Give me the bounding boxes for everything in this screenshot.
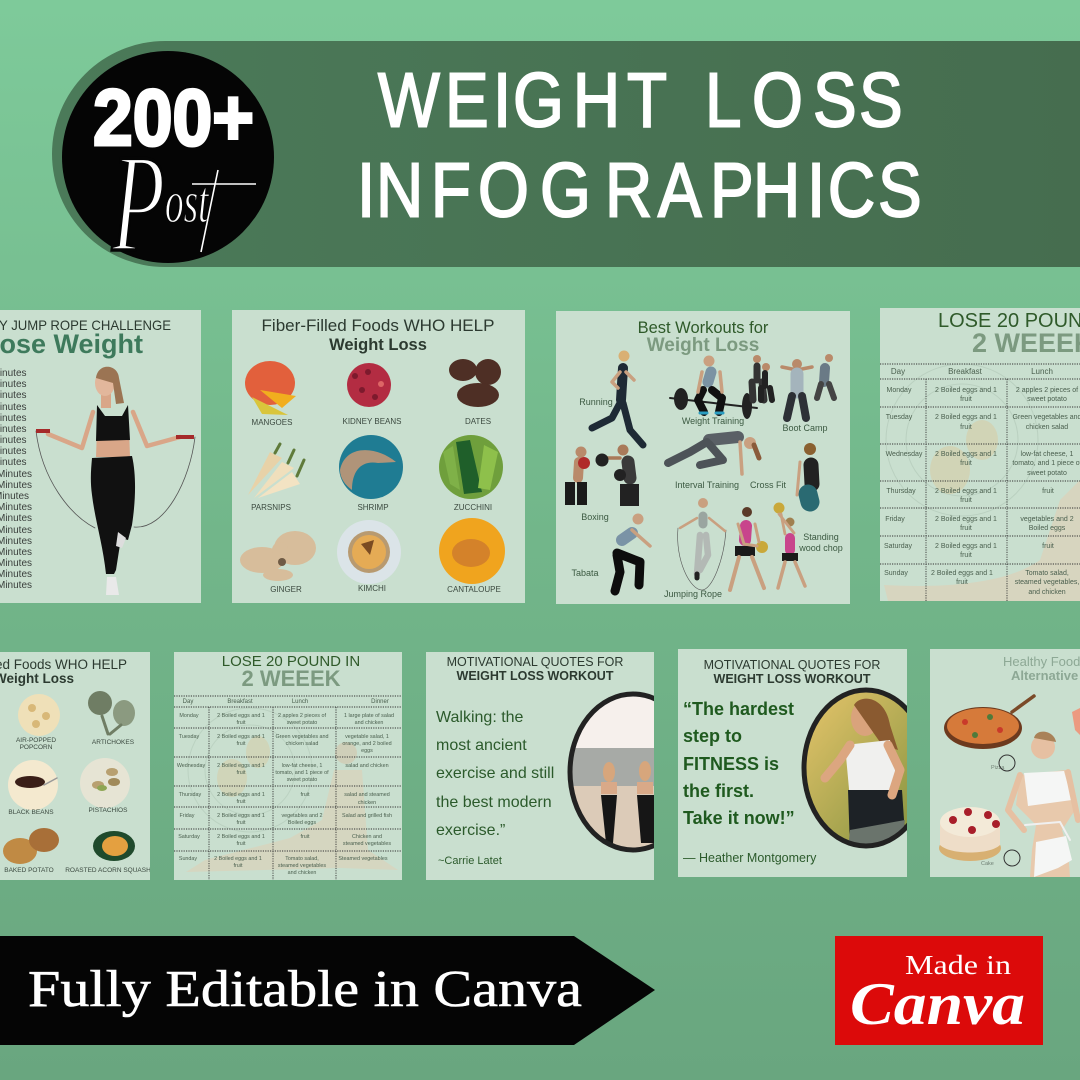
heading: jump rope	[0, 317, 171, 359]
table text: Green vegetables and	[1013, 414, 1080, 421]
figure: interval training	[668, 437, 759, 474]
icon: pistachios	[80, 758, 130, 808]
food labels: KIDNEY BEANS	[343, 417, 401, 426]
table text: Wednesday	[886, 451, 923, 458]
table grid center	[174, 696, 402, 880]
heading: fiber foods second	[0, 657, 127, 686]
table text center: 2 Boiled eggs and 1	[217, 834, 265, 840]
food labels: CANTALOUPE	[447, 585, 501, 594]
table text center: fruit	[234, 863, 243, 869]
table text center: salad and steamed	[344, 792, 390, 798]
table text center: steamed vegetables	[343, 841, 391, 847]
figure: medicine ball woman	[730, 507, 768, 590]
table text center: 2 apples 2 pieces of	[278, 713, 326, 719]
table text: fruit	[1042, 543, 1054, 550]
heading: healthy food: Healthy Food	[1003, 654, 1080, 669]
table text center: Tomato salad,	[285, 856, 319, 862]
heading: motivational quotes second: WEIGHT LOSS WORKOUT	[714, 672, 871, 686]
table text center: Day	[183, 699, 193, 705]
heading: motivational quotes: MOTIVATIONAL QUOTES FOR	[447, 655, 623, 669]
figure: weight training	[670, 356, 757, 419]
figure: woman with jump rope	[36, 367, 195, 595]
table text: Monday	[887, 387, 912, 394]
table text center: Breakfast	[227, 699, 253, 705]
ribbon: fully editable: Fully Editable in Canva	[28, 961, 582, 1018]
quote text	[436, 709, 554, 839]
table text: Sunday	[884, 570, 908, 577]
table text center: tomato, and 1 piece of	[275, 770, 329, 776]
table text: 2 Boiled eggs and 1	[935, 516, 997, 523]
workout labels: Tabata	[571, 568, 599, 578]
food labels second: ARTICHOKES	[92, 739, 135, 746]
food labels second: ROASTED ACORN SQUASH	[65, 867, 151, 874]
icon: popcorn	[18, 694, 60, 736]
panel: fiber-filled foods	[232, 310, 525, 603]
icon: parsnips	[248, 444, 304, 498]
table text center: 2 Boiled eggs and 1	[217, 763, 265, 769]
table text center: fruit	[236, 741, 246, 747]
food labels second: PISTACHIOS	[89, 807, 128, 814]
table text: Thursday	[886, 488, 916, 495]
table text: 2 Boiled eggs and 1	[935, 488, 997, 495]
table text: fruit	[1042, 488, 1054, 495]
food labels second: POPCORN	[20, 744, 53, 751]
figure: boot camp group	[752, 354, 834, 418]
icon: cantaloupe	[439, 518, 505, 584]
food labels: KIMCHI	[358, 584, 386, 593]
table text center: Green vegetables and	[275, 734, 329, 740]
table text: 2 Boiled eggs and 1	[935, 414, 997, 421]
table text: steamed vegetables,	[1015, 579, 1079, 586]
figure: running	[592, 350, 643, 445]
quote text bold: the first.	[683, 781, 754, 801]
icon: mango	[245, 361, 296, 415]
quote text bold: step to	[683, 726, 742, 746]
table text center: fruit	[236, 799, 246, 805]
icon: pizza	[944, 696, 1034, 749]
table text: fruit	[960, 396, 972, 403]
table text: Friday	[885, 516, 905, 523]
quote text: exercise.”	[436, 822, 505, 839]
panel: meal plan table center	[174, 652, 402, 880]
heading: best workouts	[638, 319, 769, 356]
table text center: sweet potato	[287, 720, 317, 726]
table text: Breakfast	[948, 367, 983, 376]
title: INFOGRAPHICS	[357, 148, 922, 234]
table text: sweet potato	[1027, 396, 1067, 403]
food labels second	[4, 737, 151, 874]
table text: 2 Boiled eggs and 1	[935, 387, 997, 394]
heading: motivational quotes	[448, 657, 623, 680]
icon: salmon	[1072, 708, 1080, 735]
heading: lose 20 pound center	[223, 656, 359, 686]
table text: tomato, and 1 piece of	[1012, 460, 1080, 467]
table text: 2 Boiled eggs and 1	[935, 451, 997, 458]
icon: cake	[939, 807, 1001, 861]
workout labels: Boxing	[581, 512, 609, 522]
table text center: 2 Boiled eggs and 1	[217, 713, 265, 719]
table text center: Friday	[180, 813, 195, 819]
panel: healthy food alternatives	[930, 649, 1080, 877]
workout labels: wood chop	[798, 543, 843, 553]
food labels second: BLACK BEANS	[8, 809, 54, 816]
table text center: Chicken and	[352, 834, 382, 840]
figure: tabata	[615, 514, 650, 591]
table text center: fruit	[236, 720, 246, 726]
icon: shrimp	[339, 435, 403, 499]
table text center: sweet potato	[287, 777, 317, 783]
table text: fruit	[960, 552, 972, 559]
attribution second: — Heather Montgomery	[683, 851, 817, 865]
heading: fiber foods	[262, 317, 494, 354]
food labels: ZUCCHINI	[454, 503, 492, 512]
heading: fiber foods: Weight Loss	[329, 336, 427, 354]
table text center: fruit	[300, 792, 310, 798]
panel: jump rope challenge	[0, 310, 201, 603]
background plate and woman	[884, 364, 1080, 601]
quote text: Walking: the	[436, 709, 524, 726]
table text center: fruit	[236, 820, 246, 826]
title	[357, 58, 922, 234]
photo: woman running	[802, 688, 907, 848]
table text center: 2 Boiled eggs and 1	[217, 813, 265, 819]
table text center: Saturday	[178, 834, 200, 840]
table text center: Salad and grilled fish	[342, 813, 392, 819]
table text: fruit	[960, 460, 972, 467]
food labels and circles	[981, 755, 1020, 867]
table text center: Lunch	[292, 699, 308, 705]
quote text bold: “The hardest	[683, 699, 794, 719]
heading: best workouts: Best Workouts for	[638, 319, 769, 337]
table text center: Tuesday	[179, 734, 200, 740]
food labels second: AIR-POPPED	[16, 737, 56, 744]
badge: 200+ Post	[62, 51, 274, 281]
table text: Tuesday	[886, 414, 913, 421]
panel: quote fitness	[678, 649, 930, 877]
figure: woman with tape	[1008, 732, 1078, 877]
table text: 2 Boiled eggs and 1	[935, 543, 997, 550]
table text center: low-fat cheese, 1	[282, 763, 322, 769]
table text center: Monday	[179, 713, 199, 719]
food labels and circles: Pizza	[991, 765, 1005, 771]
workout labels	[571, 397, 843, 599]
figure: jumping rope	[678, 498, 726, 590]
food labels: GINGER	[270, 585, 302, 594]
icon: ginger	[240, 531, 316, 581]
heading: motivational quotes second	[704, 660, 880, 683]
food labels: PARSNIPS	[251, 503, 291, 512]
ribbon: fully editable	[0, 936, 655, 1045]
photo: women on beach	[568, 692, 654, 852]
table text center: fruit	[236, 841, 246, 847]
heading: lose 20 pound	[940, 313, 1080, 352]
icon: acorn squash	[93, 831, 135, 861]
quote text: the best modern	[436, 794, 552, 811]
badge: 200+ Post: ost	[165, 169, 209, 235]
table text: and chicken	[1028, 589, 1066, 596]
table text center: 2 Boiled eggs and 1	[217, 792, 265, 798]
food labels second: BAKED POTATO	[4, 867, 54, 874]
heading: motivational quotes: WEIGHT LOSS WORKOUT	[457, 669, 614, 683]
table text center: vegetable salad, 1	[345, 734, 389, 740]
table text: low-fat cheese, 1	[1021, 451, 1074, 458]
icon: kidney beans	[347, 363, 391, 407]
icon: zucchini	[439, 435, 503, 499]
heading: lose 20 pound center: LOSE 20 POUND IN	[222, 653, 360, 670]
heading: healthy food: Alternative	[1011, 668, 1078, 683]
quote text: most ancient	[436, 737, 527, 754]
table text: Boiled eggs	[1029, 525, 1066, 532]
quote text bold: Take it now!”	[683, 808, 795, 828]
heading: best workouts: Weight Loss	[647, 335, 759, 356]
table text: vegetables and 2	[1020, 516, 1074, 523]
food labels: DATES	[465, 417, 491, 426]
food labels: MANGOES	[252, 418, 292, 427]
figure: overhead ball woman	[774, 502, 805, 588]
workout labels: Standing	[803, 532, 839, 542]
table text center: Steamed vegetables	[338, 856, 388, 862]
table text: Lunch	[1031, 367, 1053, 376]
icon: artichokes	[88, 691, 135, 734]
table text center: Wednesday	[177, 763, 205, 769]
panel: best workouts	[556, 311, 850, 604]
panel: meal plan table right	[880, 308, 1080, 601]
table text center	[177, 699, 394, 876]
table text center: chicken	[358, 800, 376, 806]
table text: fruit	[960, 424, 972, 431]
badge: 200+ Post: 200+	[93, 73, 254, 162]
table text center: Thursday	[179, 792, 202, 798]
food labels: SHRIMP	[357, 503, 389, 512]
heading: healthy food	[1004, 656, 1080, 680]
badge: made in canva: Canva	[850, 971, 1025, 1037]
table text center: fruit	[236, 770, 246, 776]
icon: black beans	[8, 760, 58, 810]
heading: lose 20 pound center: 2 WEEEK	[241, 666, 341, 691]
panel: quote walking	[426, 652, 654, 880]
table text: Saturday	[884, 543, 913, 550]
quote text: exercise and still	[436, 765, 554, 782]
table text center: salad and chicken	[345, 763, 389, 769]
table text: 2 apples 2 pieces of	[1016, 387, 1078, 394]
table text center: orange, and 2 boiled	[342, 741, 392, 747]
table text center: chicken salad	[286, 741, 318, 747]
table text center: 2 Boiled eggs and 1	[214, 856, 262, 862]
table text: fruit	[960, 525, 972, 532]
table text center: and chicken	[288, 870, 316, 876]
table text center: steamed vegetables	[278, 863, 326, 869]
workout labels: Cross Fit	[750, 480, 786, 490]
heading: jump rope: Y JUMP ROPE CHALLENGE	[0, 317, 171, 333]
background plate and woman second	[186, 708, 398, 872]
table text: Day	[891, 367, 905, 376]
food labels and circles: Cake	[981, 861, 994, 867]
table text center: Sunday	[179, 856, 197, 862]
badge: 200+ Post: P	[112, 126, 165, 281]
table text center: 2 Boiled eggs and 1	[217, 734, 265, 740]
workout labels: Running	[579, 397, 613, 407]
heading: motivational quotes second: MOTIVATIONAL QUOTES FOR	[704, 658, 880, 672]
table text: fruit	[956, 579, 968, 586]
workout labels: Weight Training	[682, 416, 744, 426]
table text: Tomato salad,	[1025, 570, 1069, 577]
table text: 2 Boiled eggs and 1	[931, 570, 993, 577]
attribution: ~Carrie Latet	[438, 855, 502, 867]
table grid	[880, 364, 1080, 601]
title: WEIGHT LOSS	[378, 58, 903, 144]
workout labels: Jumping Rope	[664, 589, 722, 599]
table text center: vegetables and 2	[281, 813, 323, 819]
table text: sweet potato	[1027, 470, 1067, 477]
quote text bold: FITNESS is	[683, 754, 779, 774]
workout labels: Interval Training	[675, 480, 739, 490]
table text center: eggs	[361, 748, 373, 754]
figure: cross fit	[797, 443, 816, 502]
badge: made in canva: Made in	[905, 950, 1012, 980]
table text center: 1 large plate of salad	[344, 713, 394, 719]
badge: made in canva	[835, 936, 1043, 1045]
workout labels: Boot Camp	[782, 423, 828, 433]
table text center: and chicken	[355, 720, 383, 726]
icon: baked potato	[3, 828, 59, 864]
table text center: Boiled eggs	[288, 820, 316, 826]
table text center: Dinner	[371, 699, 389, 705]
quote text bold	[683, 699, 795, 828]
panel: fiber foods second	[0, 652, 151, 880]
header band	[52, 41, 1080, 267]
table text: chicken salad	[1026, 424, 1068, 431]
heading: fiber foods: Fiber-Filled Foods WHO HELP	[262, 317, 494, 335]
table text center: fruit	[300, 834, 310, 840]
food labels	[251, 417, 501, 594]
icon: kimchi jar	[337, 520, 401, 584]
minutes list	[0, 368, 32, 591]
figure: boxing pair	[565, 444, 639, 506]
table text: fruit	[960, 497, 972, 504]
icon: dates	[449, 359, 501, 407]
table text	[884, 367, 1080, 596]
